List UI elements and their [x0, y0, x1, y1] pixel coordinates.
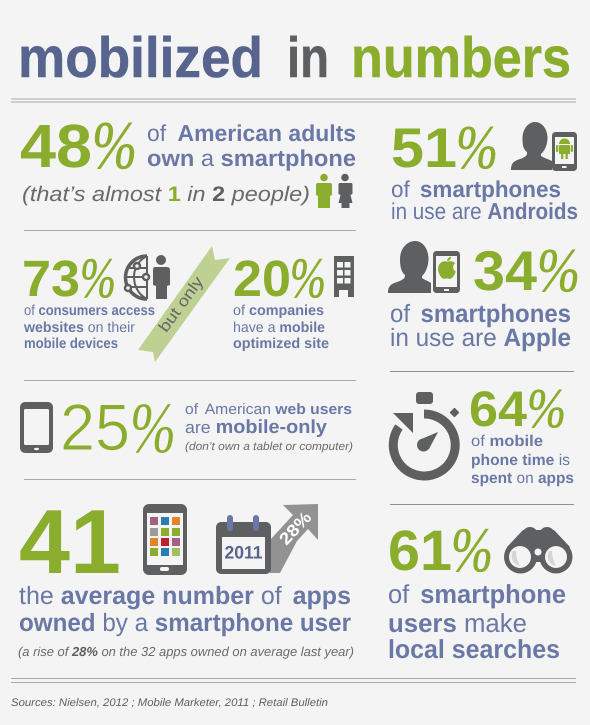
icon: stopwatch: [393, 392, 459, 476]
ribbon: but only: [138, 246, 230, 362]
text: of American adults own a smartphone: of American adults: [147, 120, 356, 146]
text: of smartphones in use are Apple: [390, 300, 571, 352]
title: mobilized: [18, 26, 263, 90]
panel: 34% Apple: [388, 237, 580, 352]
stat: 20%: %: [290, 247, 326, 310]
stat: 48%: %: [92, 107, 137, 183]
stat: 34%: 34: [473, 239, 537, 302]
stat: 20%: 20: [233, 250, 291, 307]
stat: 25%: 25: [60, 390, 130, 464]
text: of consumers access websites on their mobile devices: mobile devices: [24, 336, 118, 352]
icon: 2011 calendar: 2011: [224, 542, 262, 562]
stat: 51%: %: [456, 114, 498, 182]
icon: phone with apps: [143, 504, 187, 575]
text: don't own a tablet or computer: (don’t own a tablet or computer): [185, 441, 353, 453]
stat: 73%: [22, 247, 116, 310]
text: a rise of 28%: (a rise of 28% on the 32 apps owned on average last year): [18, 644, 354, 659]
title: [18, 26, 571, 90]
sources: Sources: Nielsen, 2012 ; Mobile Marketer, 2011 ; Retail Bulletin: [11, 697, 328, 709]
icon: person: [511, 122, 552, 170]
panel: 73% of consumers: [22, 247, 170, 352]
text: of consumers access websites on their mobile devices: websites on their: [23, 320, 135, 336]
stat: 48%: 48: [20, 112, 92, 180]
icon: 2011 calendar: [216, 515, 271, 574]
icon: apple phone: [433, 251, 460, 293]
text: of smartphone users make local searches: users make: [388, 608, 527, 638]
icon: person: [388, 241, 431, 293]
text: of smartphones in use are Androids: [391, 176, 578, 224]
text: the average number of apps owned by a smartphone user: the average number of apps: [19, 582, 351, 610]
text: of smartphone users make local searches: [388, 579, 566, 664]
icon: grey woman: [338, 174, 352, 208]
panel: 25% mobile-only: [20, 388, 353, 468]
stat: 61%: 61: [388, 519, 452, 583]
text: of consumers access websites on their mobile devices: of consumers access: [24, 303, 155, 319]
text: of companies have a mobile optimized site: [233, 303, 329, 352]
stat: 48%: [20, 107, 137, 183]
stat: 61%: %: [451, 515, 493, 585]
text: of smartphone users make local searches: of smartphone: [388, 579, 566, 609]
text: of American web users are mobile-only: [185, 401, 352, 438]
icon: rising arrow with 28%: [270, 504, 318, 573]
icon: binoculars: [504, 527, 572, 574]
text: of American adults own a smartphone: [147, 120, 356, 171]
title: in: [287, 26, 329, 90]
icon: android phone: [552, 132, 577, 171]
stat: 25%: [60, 388, 176, 468]
text: of smartphones in use are Apple: in use are Apple: [390, 324, 571, 352]
text: of mobile phone time is spent on apps: spent on apps: [471, 470, 574, 487]
icon: rising arrow with 28%: 28%: [275, 508, 315, 549]
icon: green man: [316, 174, 332, 208]
panel: 48% own a smartphone: [20, 107, 356, 208]
stat: 34%: %: [537, 237, 580, 305]
icon: office building: [334, 256, 354, 297]
panel: 64% phone time on apps: [393, 378, 574, 487]
text: that's almost 1 in 2 people: (that’s almost 1 in 2 people): [22, 183, 310, 206]
text: of consumers access websites on their mobile devices: [23, 303, 155, 352]
stat: 64%: %: [527, 378, 566, 440]
stat: 73%: 73: [22, 250, 80, 307]
ribbon: but only: but only: [156, 274, 207, 336]
text: of mobile phone time is spent on apps: of mobile: [471, 433, 543, 450]
text: of companies have a mobile optimized site: optimized site: [233, 336, 329, 352]
text: the average number of apps owned by a smartphone user: owned by a smartphone user: [19, 609, 351, 637]
text: the average number of apps owned by a smartphone user: [19, 582, 351, 637]
text: of companies have a mobile optimized site: have a mobile: [233, 320, 325, 336]
text: of companies have a mobile optimized site: of companies: [233, 303, 324, 319]
stat: 64%: 64: [469, 381, 527, 437]
stat: 41: 41: [19, 492, 121, 593]
panel: 41 apps: [18, 492, 354, 659]
icon: tablet phone: [20, 402, 53, 453]
panel: 20% of companies: [233, 247, 354, 352]
stat: 64%: [469, 378, 566, 440]
text: of American adults own a smartphone: own a smartphone: [147, 145, 356, 171]
text: of American web users are mobile-only: are mobile-only: [185, 417, 327, 438]
text: of mobile phone time is spent on apps: [471, 433, 574, 487]
stat: 51%: 51: [391, 116, 457, 179]
icon: businessman: [153, 255, 170, 299]
text: of smartphones in use are Androids: in use are Androids: [391, 198, 578, 224]
text: of mobile phone time is spent on apps: phone time is: [471, 452, 570, 469]
stat: 73%: %: [80, 247, 116, 310]
stat: 51%: [391, 114, 498, 182]
stat: 34%: [473, 237, 580, 305]
panel: 51% Androids: [391, 114, 578, 224]
text: of American web users are mobile-only: of American web users: [185, 401, 352, 418]
icon: globe: [125, 256, 149, 299]
text: of smartphones in use are Apple: of smartphones: [390, 300, 571, 328]
panel: 61% local searches: [388, 515, 572, 664]
stat: 25%: %: [130, 388, 176, 468]
stat: 61%: [388, 515, 493, 585]
text: of smartphone users make local searches: local searches: [388, 634, 560, 664]
text: of smartphones in use are Androids: of smartphones: [391, 176, 561, 202]
stat: 20%: [233, 247, 326, 310]
title: numbers: [351, 26, 571, 90]
